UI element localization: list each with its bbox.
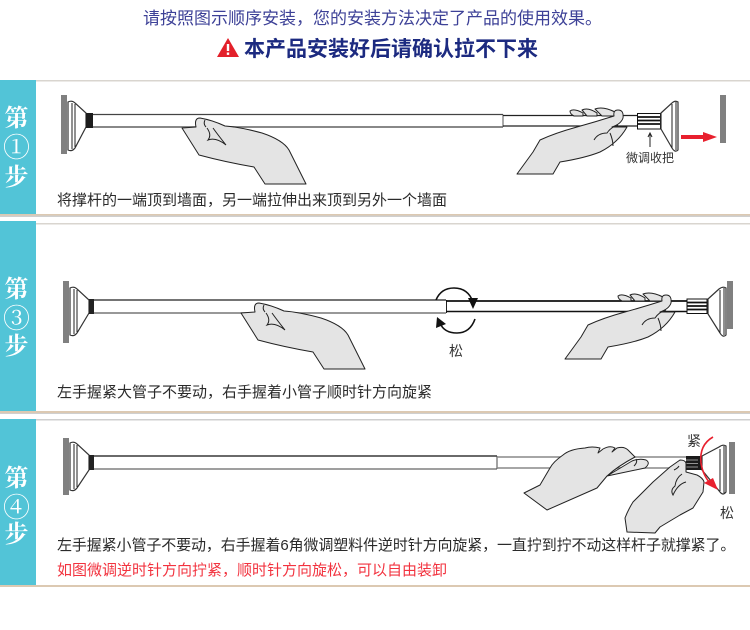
left hand <box>241 303 365 369</box>
step 1 tab <box>0 80 36 214</box>
left wall <box>63 438 69 495</box>
step 1 tab: 步 <box>4 164 28 191</box>
step 3 tab <box>0 221 36 411</box>
rod: tubes <box>94 456 686 469</box>
step 3 tab: ③ <box>3 304 30 334</box>
adjuster collar <box>687 299 707 314</box>
left suction cup <box>68 101 93 151</box>
label: adjuster handle: 微调收把 <box>626 151 674 165</box>
step 3 tab: 步 <box>4 333 28 360</box>
warning text: 本产品安装好后请确认拉不下来 <box>244 37 538 61</box>
panel: step 1 <box>0 80 750 217</box>
adjuster collar <box>686 456 702 470</box>
panel: step 4 <box>0 419 750 587</box>
rotation arrows <box>436 288 478 333</box>
lower hand <box>625 460 704 533</box>
step 4 tab: 第 <box>4 465 28 492</box>
red turning arrow <box>701 437 718 490</box>
rod: tubes <box>93 114 637 128</box>
step 4 red note: 如图微调逆时针方向拧紧，顺时针方向旋松，可以自由装卸 <box>57 562 447 579</box>
right wall <box>729 442 735 494</box>
panel: step 3 <box>0 221 750 414</box>
step 4 tab <box>0 419 36 585</box>
icon: warning triangle <box>217 38 239 57</box>
step 1 tab: ① <box>3 133 30 163</box>
right wall <box>727 281 733 329</box>
label: loosen: 松 <box>720 505 734 521</box>
upper hand <box>524 447 648 510</box>
step 3 tab: 第 <box>4 276 28 303</box>
right suction cup <box>661 101 678 151</box>
left suction cup <box>70 442 94 491</box>
right suction cup <box>702 445 726 494</box>
left wall <box>61 95 67 154</box>
step 4 caption: 左手握紧小管子不要动，右手握着6角微调塑料件逆时针方向旋紧，一直拧到拧不动这样杆子就撑紧了。 <box>57 537 735 554</box>
rod: tubes <box>94 300 687 313</box>
right hand <box>565 293 675 359</box>
red arrow <box>681 132 717 142</box>
up arrow pointer <box>648 133 652 147</box>
right wall <box>720 95 726 143</box>
label: loosen: 松 <box>449 343 463 359</box>
step 4 tab: ④ <box>3 493 30 523</box>
left hand <box>182 118 306 184</box>
adjuster collar <box>638 114 660 129</box>
left wall <box>63 281 69 343</box>
title: installation instruction: 请按照图示顺序安装，您的安装方法决定了产品的使用效果。 <box>143 8 602 28</box>
step 1 caption: 将撑杆的一端顶到墙面，另一端拉伸出来顶到另外一个墙面 <box>57 192 447 209</box>
right suction cup <box>708 287 726 336</box>
warning heading <box>217 37 538 61</box>
step 3 caption: 左手握紧大管子不要动，右手握着小管子顺时针方向旋紧 <box>57 384 432 401</box>
step 1 tab: 第 <box>4 105 28 132</box>
right hand <box>517 108 627 174</box>
left suction cup <box>70 287 94 336</box>
step 4 tab: 步 <box>4 521 28 548</box>
label: tighten: 紧 <box>687 433 701 449</box>
